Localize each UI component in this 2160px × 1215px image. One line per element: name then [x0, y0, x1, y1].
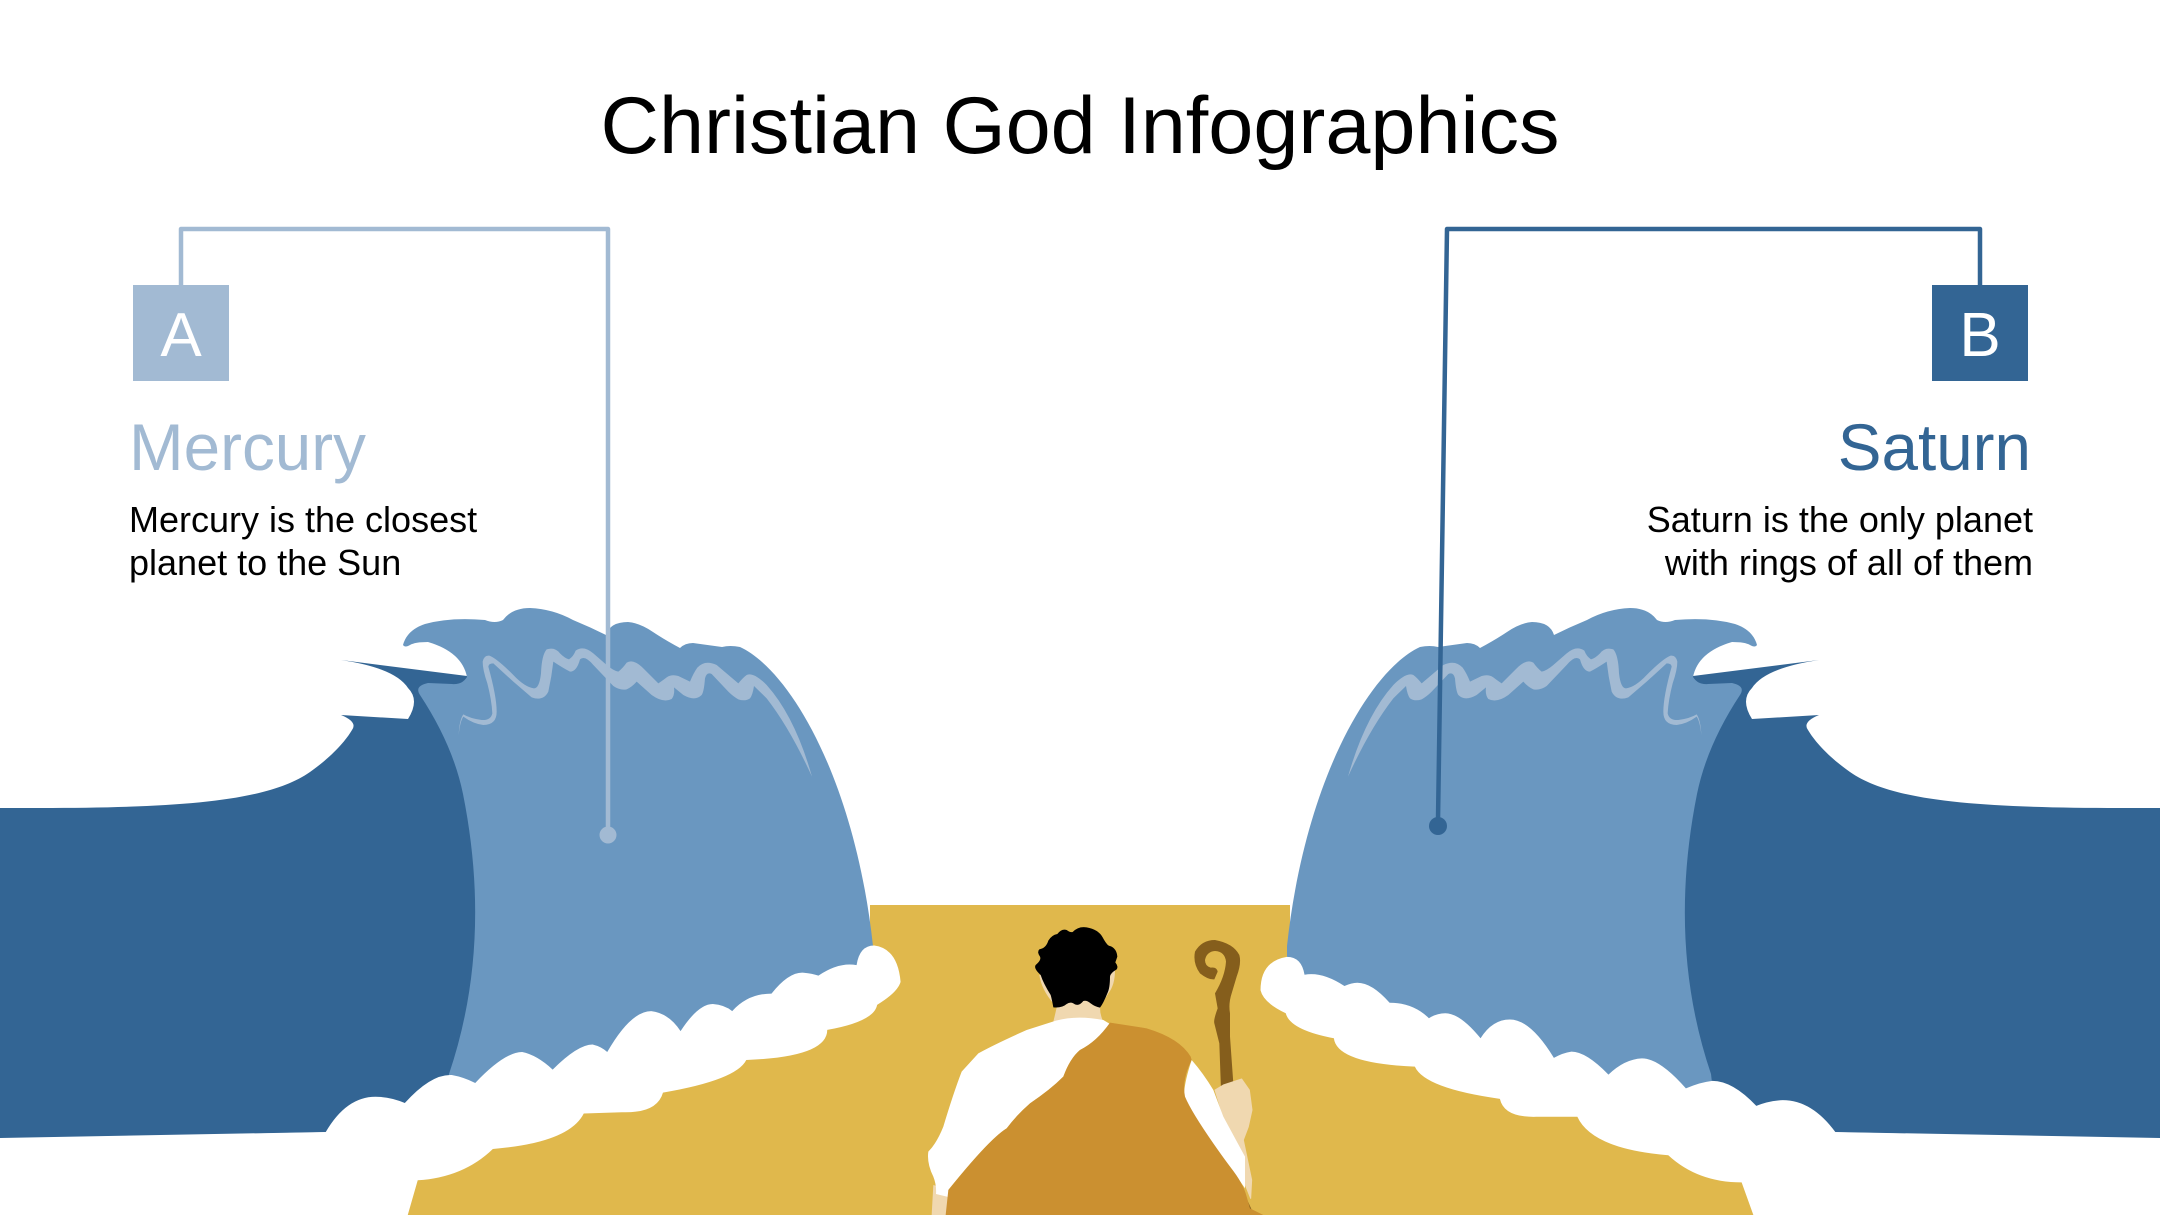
badge B: [1932, 285, 2028, 381]
left wave crest highlight: [459, 648, 812, 777]
badge B: B: [1959, 301, 2001, 370]
callout line A: [181, 229, 616, 844]
staff: [1194, 940, 1253, 1213]
description: Mercury: planet to the Sun: [129, 542, 401, 583]
heading: Saturn: Saturn: [1838, 411, 2031, 484]
black curly hair: [1035, 927, 1117, 1008]
badge A: A: [160, 301, 202, 370]
left wave dark body: [0, 660, 495, 1138]
right parted sea wave: [1261, 608, 2160, 1215]
description: Saturn: Saturn is the only planet: [1647, 499, 2033, 540]
left wave light face: [403, 608, 873, 1100]
title: Christian God Infographics: [600, 81, 1560, 171]
skin: right hand and forearm: [1215, 1079, 1252, 1198]
white undergarment: [928, 1018, 1245, 1197]
left sea foam: [0, 946, 901, 1215]
figure: robed man with staff, seen from behind: [928, 927, 1263, 1215]
heading: Mercury: Mercury: [129, 411, 366, 484]
skin: left wrist: [932, 1185, 950, 1215]
left parted sea wave: [0, 608, 901, 1215]
badge A: [133, 285, 229, 381]
right wave crest highlight: [1348, 648, 1701, 777]
right wave dark body: [1665, 660, 2160, 1138]
description: Saturn: with rings of all of them: [1664, 542, 2033, 583]
skin: ears and neck: [1039, 970, 1115, 1022]
description: Mercury: Mercury is the closest: [129, 499, 477, 540]
right sea foam: [1261, 957, 2160, 1215]
sand ground: [380, 905, 1780, 1215]
right wave light face: [1287, 608, 1757, 1100]
callout line B: [1429, 229, 1980, 835]
ochre robe: [946, 1023, 1263, 1215]
